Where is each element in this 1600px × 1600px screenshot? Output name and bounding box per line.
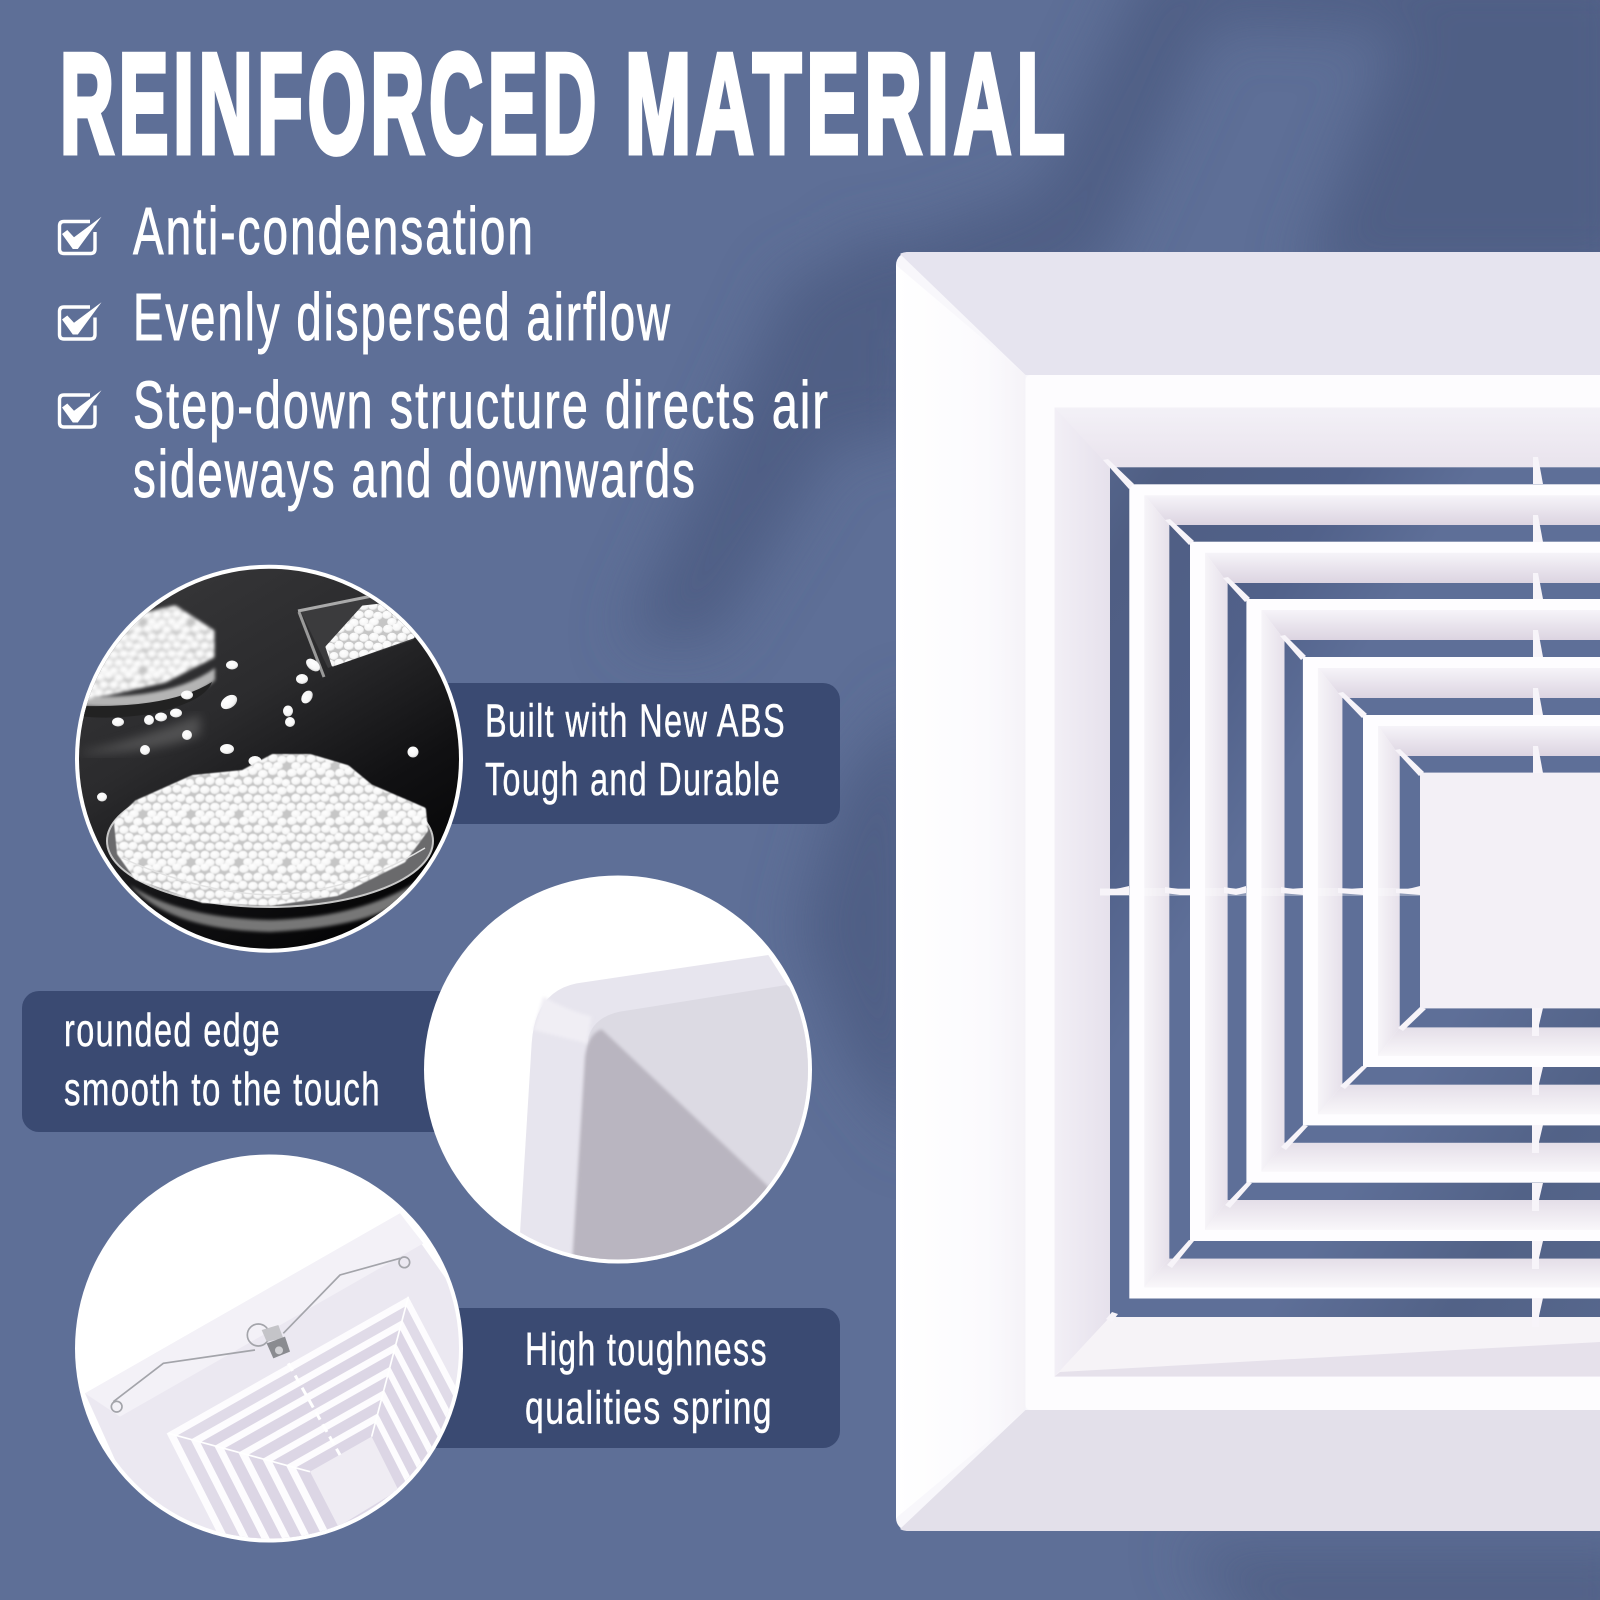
callout bar: rounded edge	[22, 991, 482, 1132]
louver 3	[1228, 583, 1600, 1200]
callout text: spring: High toughness	[525, 1323, 768, 1375]
tilted vent plate	[85, 1214, 459, 1531]
product: ceiling vent grille	[896, 252, 1600, 1531]
large glass dish of pellets	[107, 757, 433, 932]
louver 1	[1110, 467, 1600, 1317]
louver support struts	[1100, 457, 1543, 1327]
callout bar: spring	[380, 1308, 840, 1448]
item: anti-condensation	[60, 194, 535, 269]
photo circle: rounded edge	[424, 876, 820, 1270]
louver 2	[1169, 525, 1600, 1259]
callout text: new ABS: Built with New ABS	[485, 694, 786, 746]
callout text: rounded edge	[64, 1004, 381, 1115]
test tube pouring pellets	[298, 594, 420, 677]
callout text: spring	[525, 1323, 773, 1434]
checklist	[60, 194, 830, 512]
vent outer plate	[896, 252, 1600, 1531]
callout text: spring: qualities spring	[525, 1382, 773, 1434]
loose pellets	[97, 656, 418, 802]
item: step-down structure: sideways and downwards	[133, 437, 697, 512]
callout bar: new ABS	[380, 683, 840, 824]
corner edge shape	[520, 955, 820, 1270]
title: MATERIAL	[625, 24, 1070, 184]
callout text: rounded edge: rounded edge	[64, 1004, 281, 1056]
item: step-down structure	[60, 368, 830, 512]
spring wire	[111, 1257, 410, 1412]
small dish of pellets	[80, 608, 215, 754]
title: REINFORCED	[60, 24, 601, 184]
item: step-down structure: Step-down structure directs air	[133, 368, 830, 443]
vent inner frame	[1026, 375, 1600, 1410]
item: evenly dispersed airflow: Evenly dispersed airflow	[133, 280, 672, 355]
photo circle: ABS pellets	[70, 560, 470, 960]
louver 5	[1342, 698, 1600, 1085]
tilted grille	[167, 1296, 455, 1538]
photo circle: spring clip	[75, 1154, 463, 1542]
innermost slot and center panel	[1400, 756, 1600, 1027]
callout text: rounded edge: smooth to the touch	[64, 1063, 381, 1115]
callout text: new ABS	[485, 694, 786, 805]
item: evenly dispersed airflow	[60, 280, 672, 355]
clip bracket	[262, 1325, 290, 1358]
callout text: new ABS: Tough and Durable	[485, 753, 781, 805]
item: anti-condensation: Anti-condensation	[133, 194, 535, 269]
vent recessed ring	[1054, 408, 1600, 1377]
louver 4	[1284, 640, 1600, 1143]
